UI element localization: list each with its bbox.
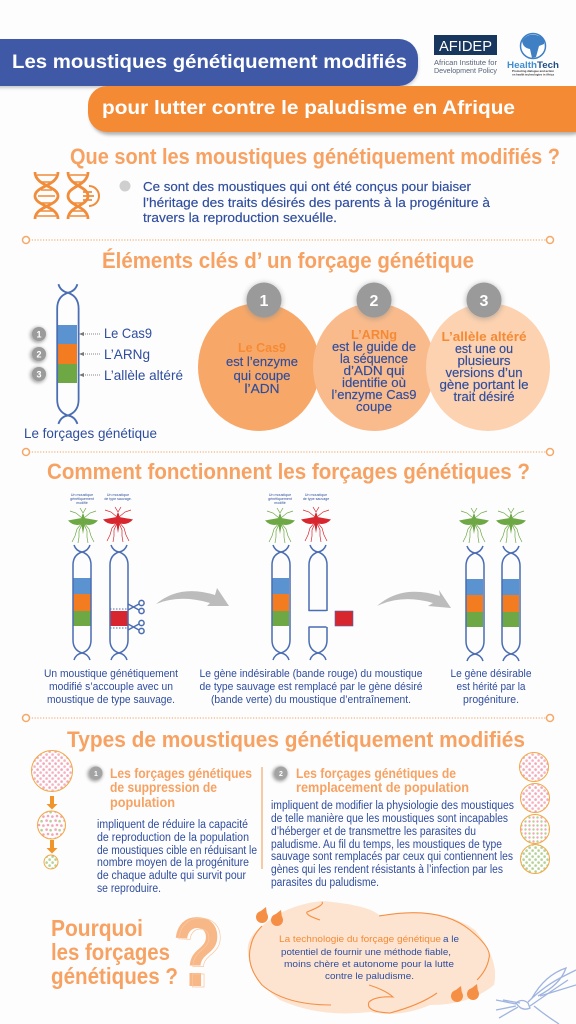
logo: HealthTech xyxy=(507,34,559,76)
suppression text block: population xyxy=(110,795,175,810)
circle 3: allèle altéré: plusieurs xyxy=(458,354,510,368)
badge 3 xyxy=(30,367,46,383)
quote text xyxy=(279,934,459,982)
chromosome diagram xyxy=(24,284,183,441)
header banner xyxy=(0,39,576,135)
circle 2: ARNg: l’enzyme Cas9 xyxy=(332,388,417,402)
logo: HealthTech: Promoting dialogue and action xyxy=(512,69,554,73)
icon: question mark: ? xyxy=(172,897,222,1007)
badge 2 xyxy=(30,347,46,363)
logo: HealthTech: on health technologies in Africa xyxy=(512,72,554,76)
suppression text block: Les forçages génétiques xyxy=(110,766,252,781)
mosquito labels: Un moustique xyxy=(269,493,291,497)
circle 2: ARNg xyxy=(313,282,435,431)
replacement text block: parasites du paludisme. xyxy=(271,877,379,889)
quote text: potentiel de fournir une méthode fiable, xyxy=(281,947,451,958)
suppression text block: de suppression de xyxy=(110,780,217,795)
replacement text block: paludisme. Au fil du temps, les moustiques de type xyxy=(271,839,502,851)
caption 2: (bande verte) du moustique d’entraînement. xyxy=(211,694,411,706)
suppression text block: de chaque adulte qui survit pour xyxy=(97,870,246,882)
caption 2 xyxy=(200,668,422,706)
circle 1: Cas9: l’ADN xyxy=(244,382,280,396)
mosquito illustration: bottom right xyxy=(496,968,576,1024)
mosquito labels: modifié xyxy=(274,501,286,505)
badge 1 xyxy=(88,766,102,782)
circle 2: ARNg: identifie où xyxy=(342,376,406,390)
mosquito labels: Un moustique xyxy=(305,493,327,497)
heading: pourquoi: Pourquoi xyxy=(51,915,143,941)
mosquito labels: génétiquement xyxy=(268,497,292,501)
circle 2: ARNg: L’ARNg xyxy=(351,328,397,342)
circle 3: allèle altéré: gène portant le xyxy=(440,378,529,392)
divider 1 xyxy=(22,236,554,244)
replacement text block: de telle manière que les moustiques sont incapables xyxy=(271,813,508,825)
caption 3: est hérité par la xyxy=(456,681,526,693)
circle 3: allèle altéré: L’allèle altéré xyxy=(442,330,527,344)
closing quote marks xyxy=(451,984,479,1002)
circle 1: Cas9: qui coupe xyxy=(234,369,291,383)
text block: definition: Ce sont des moustiques qui ont été conçus pour biaiser xyxy=(143,180,471,194)
chromosome: modified xyxy=(73,545,91,660)
vertical separator xyxy=(261,767,263,869)
caption 1 xyxy=(44,668,178,706)
mosquito: green xyxy=(265,508,295,543)
replacement text block: sauvage sont remplacés par ceux qui contiennent les xyxy=(271,851,513,863)
icon: question mark: ? xyxy=(175,898,225,1008)
removed red gene xyxy=(335,611,353,626)
circle 2: ARNg: d’ADN qui xyxy=(344,364,404,378)
heading: éléments clés: Éléments clés d’ un forçage génétique xyxy=(102,248,474,273)
mosquito labels xyxy=(70,493,132,505)
mosquito: green xyxy=(68,508,98,543)
badge 2: 2 xyxy=(36,350,42,360)
opening quote marks xyxy=(256,907,283,926)
caption 1: modifié s’accouple avec un xyxy=(49,681,173,693)
quote text: a le xyxy=(443,934,459,945)
mosquito labels: de type sauvage. xyxy=(104,497,132,501)
chromosome: cut xyxy=(305,545,329,660)
mosquito labels: Un moustique xyxy=(107,493,129,497)
chromosome diagram: Le forçages génétique xyxy=(24,426,157,441)
title line 2 xyxy=(88,86,576,132)
suppression text block: nombre moyen de la progéniture xyxy=(97,857,249,869)
replacement text block: Les forçages génétiques de xyxy=(296,766,456,781)
mosquito: red xyxy=(103,507,133,542)
badge 1 xyxy=(30,327,46,343)
circle 2: ARNg: est le guide de xyxy=(332,340,416,354)
circle 3: allèle altéré: 3 xyxy=(480,293,489,310)
suppression text block: se reproduire. xyxy=(97,883,161,895)
replacement text block xyxy=(271,766,514,889)
badge 1: 1 xyxy=(94,771,98,778)
replacement text block: impliquent de modifier la physiologie des moustiques xyxy=(271,800,514,812)
step 1 diagram xyxy=(68,493,144,660)
quote text: contre le paludisme. xyxy=(325,971,414,982)
chromosome diagram: L’allèle altéré xyxy=(104,367,183,383)
mosquito labels: Un moustique xyxy=(71,493,93,497)
logo: AFIDEP: AFIDEP xyxy=(439,39,492,55)
title line 1: Les moustiques génétiquement modifiés xyxy=(12,51,407,73)
text block: definition: l’héritage des traits désirés des parents à la progéniture à xyxy=(143,196,490,210)
divider 2 xyxy=(22,448,554,456)
logo: AFIDEP xyxy=(434,35,498,75)
chromosome left xyxy=(466,546,484,661)
caption 1: moustique de type sauvage. xyxy=(47,694,175,706)
circle 1: Cas9: Le Cas9 xyxy=(238,341,286,355)
caption 3: progéniture. xyxy=(463,694,519,706)
circle 1: Cas9: 1 xyxy=(260,293,269,310)
logo: HealthTech: Tech xyxy=(537,60,559,71)
title line 2: pour lutter contre le paludisme en Afrique xyxy=(102,97,515,119)
chromosome: modified xyxy=(272,545,290,660)
quote text: La technologie du forçage génétique xyxy=(279,934,441,945)
quote bubble xyxy=(248,901,495,1014)
population suppression icons xyxy=(32,750,72,869)
caption 1: Un moustique génétiquement xyxy=(44,668,178,680)
logo: AFIDEP: Development Policy xyxy=(434,68,497,75)
circle 2: ARNg: la séquence xyxy=(340,352,408,366)
heading: pourquoi: génétiques ? xyxy=(51,963,178,989)
logo: HealthTech: Health xyxy=(507,60,537,71)
mosquito labels: génétiquement xyxy=(70,497,94,501)
logo: AFIDEP: African Institute for xyxy=(434,60,498,67)
suppression text block: de reproduction de la population xyxy=(97,832,249,844)
text block: definition: travers la reproduction sexuélle. xyxy=(143,211,337,225)
suppression text block xyxy=(88,766,257,895)
chromosome: wild type with scissors xyxy=(110,545,144,660)
suppression text block: de moustiques cible en réduisant le xyxy=(97,845,257,857)
text block: definition xyxy=(143,180,490,225)
replacement text block: d’héberger et de transmettre les parasites du xyxy=(271,826,476,838)
step 3 diagram xyxy=(459,508,526,661)
arrow 1 xyxy=(156,588,229,606)
caption 2: Le gène indésirable (bande rouge) du moustique xyxy=(200,668,422,680)
heading: pourquoi: les forçages xyxy=(51,939,170,965)
circle 1: Cas9: est l’enzyme xyxy=(226,355,298,369)
heading: comment fonctionnent: Comment fonctionnent les forçages génétiques ? xyxy=(47,459,530,484)
chromosome diagram: L’ARNg xyxy=(104,346,150,362)
badge 2: 2 xyxy=(279,771,283,778)
circle 3: allèle altéré: versions d’un xyxy=(446,366,523,380)
circle 2: ARNg: 2 xyxy=(370,293,379,310)
badge 2 xyxy=(272,766,288,782)
step 2 diagram xyxy=(265,493,353,660)
circle 3: allèle altéré: est une ou xyxy=(455,342,513,356)
mosquito: green left xyxy=(459,508,489,543)
icon: DNA strand xyxy=(35,172,58,219)
heading: types: Types de moustiques génétiquement modifiés xyxy=(67,727,525,752)
title line 1 xyxy=(0,39,418,86)
circle 1: Cas9 xyxy=(198,282,320,431)
arrow 2 xyxy=(377,590,451,608)
chromosome diagram: Le Cas9 xyxy=(104,325,152,341)
circle 3: allèle altéré: trait désiré xyxy=(454,390,515,404)
icon: DNA edited xyxy=(68,172,99,219)
mosquito labels xyxy=(268,493,329,505)
chromosome right xyxy=(502,546,520,661)
badge 1: 1 xyxy=(36,330,42,340)
circle 3: allèle altéré xyxy=(426,282,550,431)
mosquito labels: de type sauvage xyxy=(303,497,329,501)
bullet xyxy=(120,180,130,192)
heading: pourquoi xyxy=(51,915,178,989)
caption 3: Le gène désirable xyxy=(450,668,532,680)
mosquito: green right xyxy=(496,508,526,543)
badge 3: 3 xyxy=(36,370,42,380)
replacement text block: gènes qui les rendent résistants à l’infection par les xyxy=(271,864,503,876)
mosquito labels: modifié xyxy=(76,501,88,505)
circle 2: ARNg: coupe xyxy=(356,400,392,414)
replacement text block: remplacement de population xyxy=(296,780,469,795)
divider 3 xyxy=(22,714,554,722)
suppression text block: impliquent de réduire la capacité xyxy=(97,819,248,831)
caption 2: de type sauvage est remplacé par le gène désiré xyxy=(200,681,422,693)
quote text: moins chère et autonome pour la lutte xyxy=(284,959,454,970)
mosquito: red xyxy=(301,507,331,542)
population replacement icons xyxy=(520,752,550,874)
caption 3 xyxy=(450,668,532,706)
